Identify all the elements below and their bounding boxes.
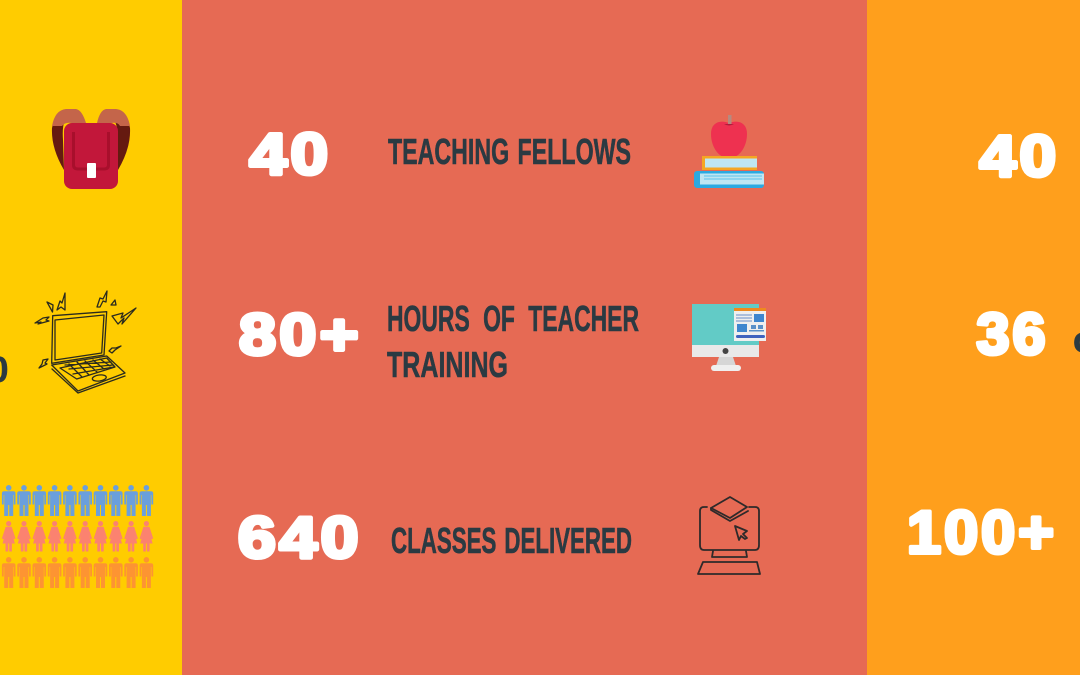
icon: apple on books [694,115,764,188]
icon: laptop with lightning bolts [35,291,136,393]
number: right column 36: 36 [976,302,1048,367]
orange men row [2,557,153,588]
number: right column 40: 40 [980,124,1060,189]
coral women row [2,521,153,552]
panel: yellow left column [0,0,182,675]
icon: online learning computer outline [698,497,760,574]
panel: orange right column [867,0,1080,675]
icon: backpack [52,109,130,189]
number: 40 teaching fellows: 40 [250,122,332,187]
label: teaching fellows: TEACHING FELLOWS [388,131,631,172]
blue men row [2,485,153,516]
panel: coral centre column [182,0,867,675]
label: hours of teacher training: TRAINING [387,344,508,385]
label: hours of teacher training [387,298,639,385]
icon: desktop monitor with web page [692,304,766,371]
label: hours of teacher training: HOURS OF TEACHER [387,298,639,339]
number: 80+ hours: 80+ [239,302,362,368]
icon: rows of people pictograms [2,485,153,588]
number: 640 classes: 640 [238,506,362,570]
number: right column 100+: 100+ [907,499,1057,566]
label: classes delivered: CLASSES DELIVERED [391,520,632,561]
